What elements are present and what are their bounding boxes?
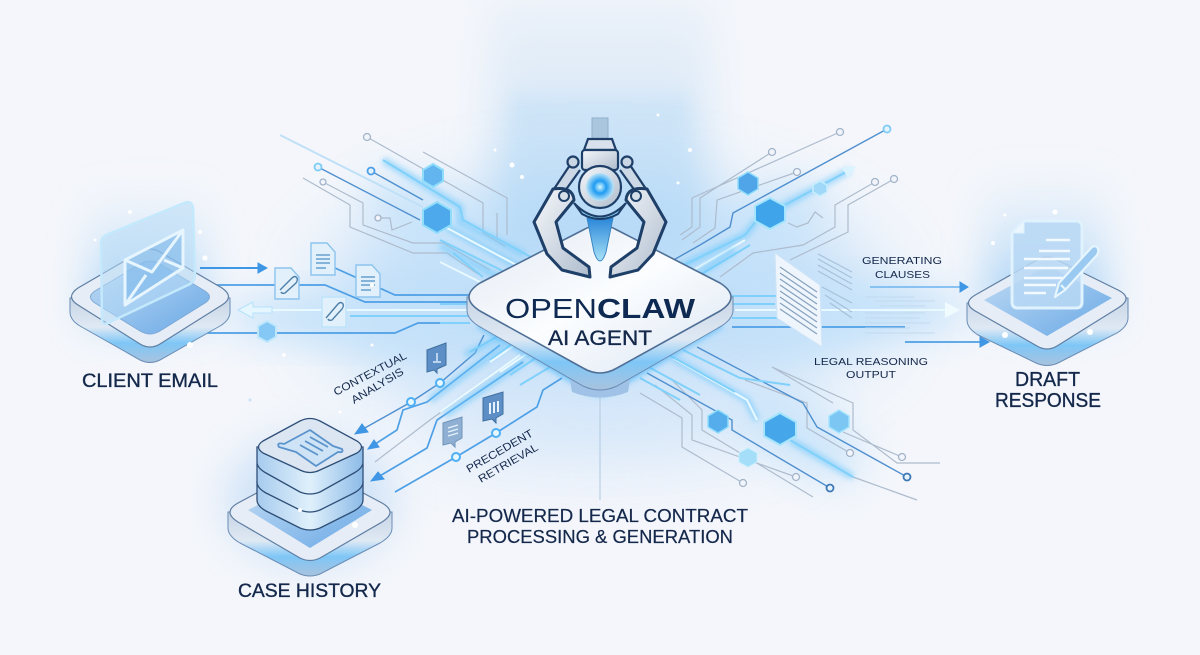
label: legal reasoning output: LEGAL REASONING [814,356,928,368]
label: draft response: DRAFT [1015,369,1080,391]
floating contract page [775,253,822,347]
claw collar [574,203,626,219]
hex node upper right 3 [755,198,785,229]
label: client email: CLIENT EMAIL [82,371,218,392]
claw head [582,150,618,170]
background glows [90,0,1105,565]
claw core [579,166,621,208]
server layer 1 [257,447,363,494]
base well [248,478,372,548]
server layer 3 [257,482,363,530]
claw left strut [544,162,580,209]
server layer 2 [257,464,363,512]
platform side [967,298,1128,366]
arrow head: to documents [258,263,267,273]
hex node lower right 4 [739,448,757,467]
subtitle: AI Agent: AI AGENT [548,327,652,350]
upper right circuit traces [670,126,898,280]
caption: PROCESSING & GENERATION [467,527,733,547]
label: case history: CASE HISTORY [238,581,381,602]
label: legal reasoning output [814,356,928,381]
platform well [984,266,1112,336]
book icon: contextual analysis [427,343,446,373]
document lines [1024,240,1070,293]
arrow: legal reasoning output [980,337,989,347]
left connection lines [200,263,470,333]
floating clause text lines [818,254,935,333]
label: generating clauses: GENERATING [862,255,942,267]
base top [230,468,390,560]
label: legal reasoning output: OUTPUT [846,369,897,381]
title: OpenClaw: OPEN [505,293,597,324]
caption: AI-POWERED LEGAL CONTRACT [452,506,748,526]
hex node upper left 2 [423,202,451,233]
arrow line: to documents [200,267,258,269]
paperclip document 1 [275,268,299,299]
document corner [1012,221,1024,233]
platform pedestal [570,380,630,398]
draft response platform [967,221,1128,366]
arrow: generating clauses [960,282,968,292]
caption [452,506,748,547]
platform glow [480,322,720,390]
document icon 1 [311,243,335,275]
arrow head: contextual [355,424,368,434]
hex node lower right 3 [829,410,849,433]
claw cap [584,139,616,150]
sparkles [94,114,1093,528]
label: contextual analysis: CONTEXTUAL [332,350,409,399]
claw left finger [534,188,590,277]
arrow head: third line [371,472,384,481]
document icon 2 [356,265,380,297]
claw right finger [610,188,666,277]
hex node lower right 1 [708,410,728,433]
client email platform [70,202,230,362]
label: draft response [995,369,1101,412]
arrow: upper right glowing [842,166,856,178]
hex node upper left 1 [423,164,443,187]
book icon: precedent upper [483,392,503,423]
label: generating clauses: CLAUSES [875,269,930,281]
arrow: back to email [238,302,272,318]
label: contextual analysis: ANALYSIS [349,366,406,407]
claw shaft [592,118,608,142]
hex node upper right 1 [738,172,758,195]
pen icon [1055,246,1098,297]
base side [228,512,392,576]
document [1012,221,1082,308]
label: precedent retrieval: PRECEDENT [464,428,536,476]
server top [258,418,362,472]
scroll icon [278,430,342,466]
paperclip document 2 [322,297,346,327]
upper left circuit traces [280,134,540,288]
label: precedent retrieval: RETRIEVAL [476,442,541,486]
arrow head: second line [368,440,379,449]
title: OpenClaw: CLAW [597,293,696,324]
hex node on left line [258,321,276,342]
glass panel [101,202,195,324]
envelope icon [125,230,183,305]
label: precedent retrieval [464,428,541,486]
platform top surface [469,225,731,373]
platform side [70,298,230,362]
claw [534,118,666,277]
label: generating clauses [862,255,942,281]
vertical connector line [599,395,601,500]
central platform [467,225,733,398]
lower right circuit traces [640,347,940,500]
title: OpenClaw [505,293,696,324]
lower left circuit traces [355,330,565,492]
platform side [467,297,733,390]
platform well [90,261,210,334]
platform top [72,249,228,347]
claw right strut [620,162,656,209]
case history platform [228,418,392,576]
book icon: precedent lower [443,417,462,447]
platform top [968,257,1126,349]
arrow: main output [945,302,960,318]
claw center blade [587,218,613,261]
hex node upper right 2 [813,181,827,196]
right connection lines [732,282,989,347]
hex node lower right 2 [764,413,796,445]
label: draft response: RESPONSE [995,390,1101,412]
